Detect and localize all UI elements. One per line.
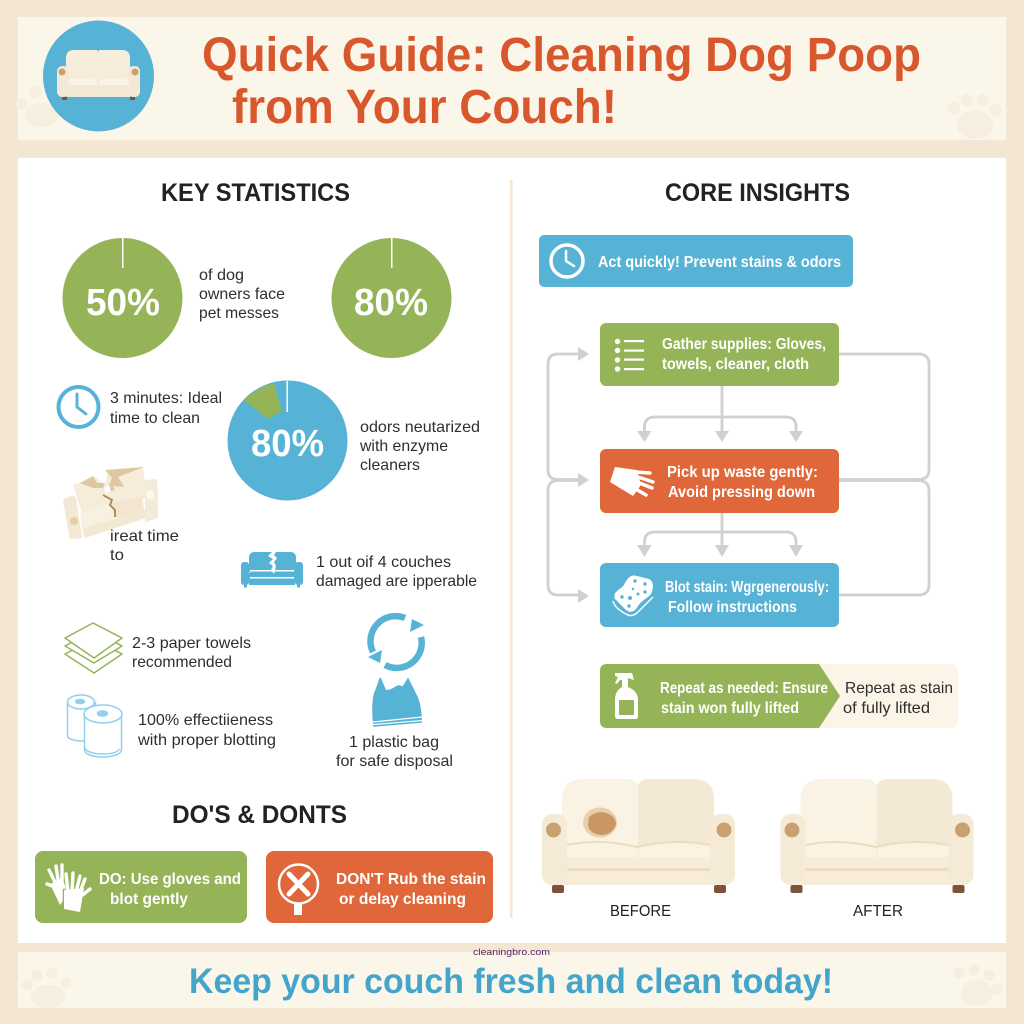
text: damaged couches: 1 out oif 4 couches bbox=[316, 554, 451, 571]
icon: gloves bbox=[47, 865, 90, 912]
text: dog owners: of dog bbox=[199, 267, 244, 284]
panel: footer bbox=[18, 952, 1006, 1009]
panel: dont bbox=[266, 851, 493, 923]
title: Quick Guide: Cleaning Dog Poop bbox=[202, 29, 921, 82]
text: dog owners bbox=[199, 267, 285, 322]
text: odors neutralized: odors neutarized bbox=[360, 419, 480, 436]
icon: clock bbox=[58, 387, 98, 427]
callout: repeat as needed bbox=[600, 664, 958, 728]
icon: footer paw left bbox=[22, 968, 72, 1009]
text: ideal time bbox=[110, 390, 222, 427]
text: odors neutralized: cleaners bbox=[360, 457, 420, 474]
text: treat time: to bbox=[110, 547, 124, 564]
panel: header bbox=[16, 17, 1006, 140]
footer text: Keep your couch fresh and clean today! bbox=[189, 962, 833, 1001]
chart: 50 percent bbox=[62, 238, 182, 358]
panel: dont: or delay cleaning bbox=[339, 891, 466, 908]
icon: header paw left bbox=[16, 86, 59, 127]
icon: checklist bbox=[615, 339, 644, 372]
text: treat time: ireat time bbox=[110, 528, 179, 545]
chart: 50 percent: 50% bbox=[86, 282, 160, 324]
flowchart arrows bbox=[548, 347, 929, 603]
step: pick up waste: Avoid pressing down bbox=[668, 484, 815, 501]
text: plastic bag: for safe disposal bbox=[336, 753, 453, 770]
callout: repeat as needed: of fully lifted bbox=[843, 700, 930, 717]
step: pick up waste: Pick up waste gently: bbox=[667, 464, 818, 481]
title bbox=[202, 29, 921, 134]
panel: do: DO: Use gloves and bbox=[99, 871, 241, 888]
step: blot stain bbox=[600, 563, 839, 627]
icon: recycle arrows bbox=[368, 616, 424, 668]
icon: paper towels stack bbox=[65, 623, 122, 673]
text: paper towels bbox=[132, 635, 251, 671]
text: blotting: 100% effectiieness bbox=[138, 712, 273, 729]
panel: main bbox=[18, 158, 1006, 943]
text: dog owners: owners face bbox=[199, 286, 285, 303]
chart: 80 percent blue pie: 80% bbox=[251, 423, 324, 465]
callout: act quickly bbox=[539, 235, 853, 287]
panel: do: blot gently bbox=[110, 891, 188, 908]
text: blotting: with proper blotting bbox=[137, 732, 276, 749]
icon: hand bbox=[610, 467, 653, 496]
step: blot stain: Follow instructions bbox=[668, 599, 797, 616]
icon: broken couch bbox=[63, 467, 158, 539]
heading: key statistics: KEY STATISTICS bbox=[161, 179, 350, 207]
text: odors neutralized: with enzyme bbox=[359, 438, 448, 455]
text: plastic bag bbox=[336, 734, 453, 770]
icon: stain bbox=[583, 808, 617, 838]
icon: sponge bbox=[613, 576, 653, 616]
callout: repeat as needed: stain won fully lifted bbox=[661, 700, 799, 717]
heading: core insights: CORE INSIGHTS bbox=[665, 179, 850, 207]
callout: repeat as needed: Repeat as needed: Ensure bbox=[660, 680, 828, 697]
icon: header paw right bbox=[948, 94, 1002, 139]
text: damaged couches: damaged are ipperable bbox=[316, 573, 477, 590]
text: blotting bbox=[137, 712, 276, 749]
heading: dos and donts: DO'S & DONTS bbox=[172, 801, 347, 829]
text: treat time bbox=[110, 528, 179, 564]
text: ideal time: time to clean bbox=[110, 410, 200, 427]
callout: repeat as needed: Repeat as stain bbox=[845, 680, 953, 697]
label: before: BEFORE bbox=[610, 903, 671, 920]
chart: 80 percent blue pie bbox=[228, 380, 348, 500]
icon: damaged blue couch bbox=[241, 552, 303, 588]
text: plastic bag: 1 plastic bag bbox=[349, 734, 439, 751]
panel: do bbox=[35, 851, 247, 923]
icon: no sign bbox=[279, 864, 318, 915]
icon: spray bottle bbox=[615, 673, 638, 719]
text: ideal time: 3 minutes: Ideal bbox=[110, 390, 222, 407]
step: gather supplies: towels, cleaner, cloth bbox=[662, 356, 809, 373]
text: damaged couches bbox=[316, 554, 477, 590]
step: gather supplies: Gather supplies: Gloves, bbox=[662, 336, 826, 353]
illustration: couch after bbox=[780, 779, 974, 893]
step: gather supplies bbox=[600, 323, 839, 386]
text: paper towels: recommended bbox=[132, 654, 232, 671]
icon: paper rolls bbox=[68, 695, 122, 757]
text: paper towels: 2-3 paper towels bbox=[132, 635, 251, 652]
title: from Your Couch! bbox=[232, 81, 617, 134]
icon: footer paw right bbox=[954, 964, 1002, 1006]
panel: dont: DON'T Rub the stain bbox=[336, 871, 486, 888]
text: dog owners: pet messes bbox=[199, 305, 279, 322]
icon: couch badge bbox=[43, 20, 154, 132]
step: pick up waste bbox=[600, 449, 839, 513]
chart: 80 percent green: 80% bbox=[354, 282, 428, 324]
icon: plastic bag bbox=[372, 678, 422, 726]
step: blot stain: Blot stain: Wgrgenerously: bbox=[665, 579, 829, 596]
source credit: cleaningbro.com bbox=[473, 947, 550, 958]
label: after: AFTER bbox=[853, 903, 903, 920]
chart: 80 percent green bbox=[332, 238, 452, 358]
illustration: couch before bbox=[542, 779, 735, 893]
icon: clock white bbox=[551, 245, 583, 277]
text: odors neutralized bbox=[359, 419, 480, 474]
callout: act quickly: Act quickly! Prevent stains & odors bbox=[598, 254, 841, 271]
